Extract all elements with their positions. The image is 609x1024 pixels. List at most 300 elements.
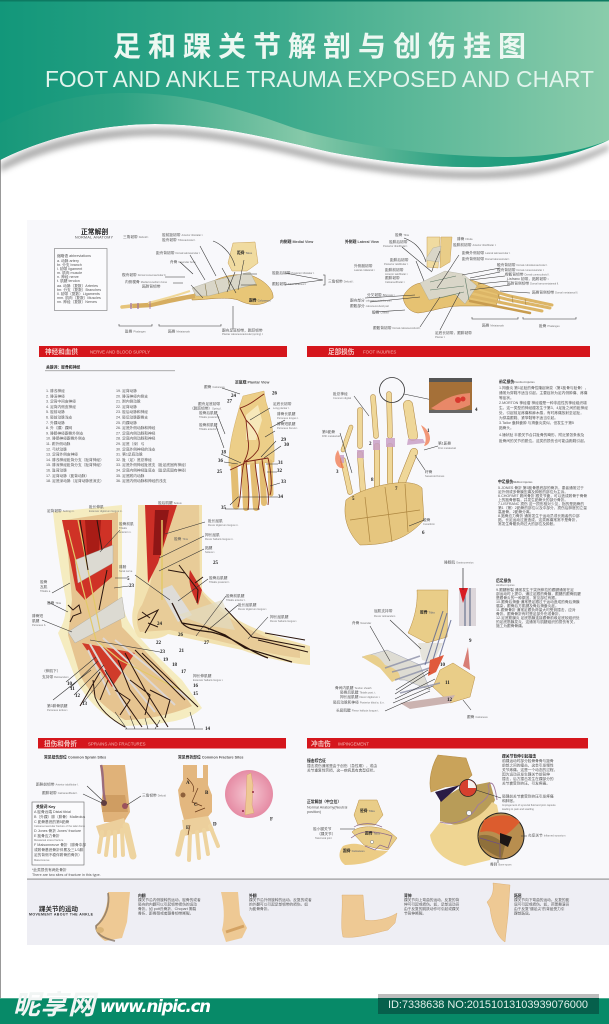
heading: 踝关节的运动: [39, 904, 78, 913]
watermark logo: [13, 983, 211, 1022]
page frame line: [0, 0, 1, 1024]
hindfoot figure: 拇长屈肌腱 Flexor digitorum t.: [340, 694, 381, 699]
ankle side view with nerves: 26: [178, 633, 184, 638]
plantar view foot: 25: [217, 470, 222, 475]
text: forefoot injuries: 2.MORTON 神经瘤 神经瘤是一种非癌性的神经组织增: [499, 400, 587, 405]
key phrase with rule: 关键词：胫骨和神经: [46, 364, 80, 370]
labels: medial view: 跟舟足底韧带，跳跃韧带: [222, 328, 263, 332]
labels: lateral view: 跖骨 Metatarsals: [482, 322, 505, 328]
text: hindfoot injuries: 是跟骨炎的一种原因，常见部位有跟。: [496, 595, 559, 600]
large ankle section figure: 因为运动员发生踝关节前背伸: [502, 772, 550, 776]
text: forefoot injuries: 3.Tailor 囊肿囊肿 与拇囊炎类似，但发生于第5: [499, 420, 574, 425]
hindfoot figure: 胫骨 Tibia: [420, 610, 435, 614]
text: inversion: 胫舟的内翻可以引起韧带损伤的运动: [138, 902, 197, 906]
ankle dorsal view with nerves: 15: [193, 692, 198, 697]
labels: medial view: 三角韧带 Deltoid l.: [123, 234, 149, 239]
numbered legend list: 20. 腓深神经内侧支: [116, 393, 148, 398]
text: forefoot injuries: 跖骨头。: [499, 425, 514, 430]
labels: lateral view: 跟骰背韧带 Dorsal calcaneocuboid l.: [373, 325, 421, 330]
common fracture sites figure: B: [205, 791, 209, 796]
common fracture sites figure: E: [186, 826, 190, 831]
text: eversion: 的外翻可以引起足部韧带的损伤。如: [249, 902, 308, 906]
text: forefoot injuries: 4.锤状趾 半脱关节合并趾骨的畸形，附近紧张条索及: [499, 432, 585, 437]
foot injuries skeleton: 5: [352, 497, 355, 502]
text: hindfoot injuries: 骨折。跟骨骨折有时是足部外伤或骨折。: [496, 611, 562, 616]
normal anatomy heading: position): [307, 810, 321, 814]
abbreviations box: 缩略语 abbreviations: [57, 253, 91, 258]
labels: lateral view: Lisfranc 韧带，跖跗韧带 l.: [507, 276, 549, 281]
text: midfoot injuries: 常发生骨骼负荷过大的部位及肿胀。: [498, 521, 557, 526]
ankle side view with nerves: 胫骨 Tibia: [174, 536, 188, 541]
plantar view foot: 足底观 Plantar View: [235, 380, 269, 384]
text: inversion: 骨折、距骨颈或者跟骨韧带撕裂。: [138, 910, 193, 916]
foot injuries skeleton: Fifth metatarsal: [322, 434, 340, 438]
text: midfoot injuries: 8.跖骨应力骨折 通常发生于运动员或长跑者的中部: [498, 513, 580, 518]
numbered legend list: 23. 胫后动脉和神经: [116, 409, 148, 414]
fracture detail circle: F: [270, 818, 273, 822]
ankle side view with nerves: Tibialis posterior t.: [209, 580, 230, 584]
numbered legend list: 5. 胫前动脉: [46, 409, 65, 414]
labels: lateral view: Calcaneofibular l.: [385, 280, 405, 284]
ankle dorsal view with nerves: 胫骨前肌: [119, 521, 134, 526]
text: dorsiflexion: 背伸: [404, 893, 412, 898]
text: hindfoot injuries: 11.跟骨骨折 通常足跟负荷量大时受到撞击，应对: [496, 607, 576, 612]
tendon detail with arrow: [459, 568, 476, 626]
text: plantarflexion: 跖屈: [514, 893, 522, 898]
numbered legend list: 16. 趾背动脉: [46, 468, 67, 472]
ankle dorsal view with nerves: 23: [129, 584, 134, 589]
abbreviations box: br. 分支 branch: [57, 262, 82, 267]
large ankle section figure: leading to pain and swelling: [502, 807, 534, 811]
labels: lateral view: 楔舟背韧带 Dorsal cuneonavicular l.: [497, 267, 544, 272]
section bar: nerve and blood supply: [39, 346, 287, 357]
section bar: foot injuries: FOOT INJURIES: [363, 350, 396, 354]
large ankle section figure: 炎症关节 Inflamed synovium: [528, 832, 565, 838]
ankle side view with nerves: 24: [157, 622, 162, 627]
panel: movement about the ankle: [29, 883, 570, 942]
numbered legend list: 19. 足背动脉: [116, 388, 137, 393]
ankle dorsal view with nerves: [32, 504, 223, 732]
ankle dorsal view with nerves: Peroneus b.: [32, 623, 46, 627]
hindfoot figure: 腓肠肌 Gastrocnemius: [444, 560, 474, 564]
numbered legend list: 15. 腓深神经趾背分支（趾背神经）: [46, 462, 104, 467]
text: forefoot injuries: 1.拇囊炎 第1足趾的骨性隆起病变（第1跖骨与趾骨），: [499, 385, 588, 390]
labels: lateral view: 外侧副韧带: [354, 263, 373, 268]
labels: lateral view: Anterior talofibular l.: [385, 272, 408, 276]
foot: medial view: [122, 242, 273, 309]
text: eversion: [249, 893, 312, 911]
plantar view foot: 35: [221, 506, 226, 511]
foot injuries skeleton: 第1跖骨: [438, 440, 451, 446]
small ankle section figure: （踝关节）: [317, 831, 335, 836]
numbered legend list: 14. 腓浅神经趾背分支（趾背神经）: [46, 457, 104, 462]
plantar view foot: 34: [278, 495, 284, 500]
labels: lateral view: 距腓后韧带: [390, 257, 409, 262]
ankle dorsal view with nerves: 瓦肌: [40, 584, 48, 589]
labels: medial view: Plantar calcaneonavicular (spring) l.: [222, 332, 264, 336]
numbered legend list: 21. 跗内侧动脉: [116, 399, 141, 404]
labels: lateral view: 三角韧带 Deltoid l.: [328, 278, 354, 284]
numbered legend list: 7. 外踝动脉: [46, 420, 65, 425]
ankle dorsal view with nerves: Extensor digitorum longus m.: [89, 509, 123, 513]
foot: dorsiflexion: [342, 895, 397, 937]
numbered legend list: 29. 足底（深）弓: [116, 441, 145, 446]
ankle dorsal view with nerves: 22: [156, 641, 162, 646]
text: plantarflexion: 踝关节向下弯曲的运动。反复的跖: [514, 897, 570, 902]
foot injuries skeleton: 4: [475, 408, 478, 413]
plantar view foot: Peroneus longus t.: [277, 416, 299, 420]
text: forefoot injuries: [499, 379, 588, 443]
labels: lateral view: [328, 232, 578, 339]
ankle dorsal view with nerves: 足背韧带 Setting m.: [47, 508, 75, 513]
text: hindfoot injuries: 后足损伤: [496, 578, 511, 583]
heading: MOVEMENT ABOUT THE ANKLE: [29, 912, 94, 916]
hindfoot figure: 跟骨 Calcaneus: [467, 714, 488, 719]
abbreviations box: nn. 神经（复数）Nerves: [57, 299, 97, 304]
foot injuries skeleton: 2: [369, 442, 372, 447]
ankle dorsal view with nerves: （伸肌下）: [42, 668, 60, 673]
text: forefoot injuries: 为穿高跟鞋、紧窄鞋等不适当引起。: [499, 415, 558, 420]
ankle side view with nerves: 拇长屈肌: [205, 532, 220, 537]
labels: medial view: 舟骨 Navicular bone: [170, 259, 196, 264]
labels: medial view: 内侧楔骨 Medial cuneiform bone: [125, 279, 168, 284]
text: midfoot injuries: 6.CHOPART 跗间骨折 跟关节囊，可以造成跗骨于骨骨: [498, 493, 587, 498]
foot injuries skeleton: 3: [336, 470, 339, 475]
small ankle section figure: [313, 800, 397, 865]
ankle dorsal view with nerves: 12: [75, 694, 80, 699]
small ankle section figure: 胫骨 Tibia: [360, 808, 375, 813]
numbered legend list: 35. 足底跗内动脉: [116, 473, 145, 478]
key box: A 胫骨远端 Distal tibial: [34, 809, 71, 814]
header banner: [0, 0, 609, 179]
plantar view foot: 腓骨短肌腱: [277, 421, 296, 426]
normal anatomy heading: Normal Anatomy(Neutral: [307, 806, 348, 810]
plantar view foot: Tibialis anterior t.: [199, 427, 219, 431]
ankle dorsal view with nerves: 拇长伸肌腱: [193, 673, 212, 678]
hindfoot figure: 11: [445, 681, 450, 686]
panel: normal anatomy: [54, 227, 315, 336]
section bar: sprains and fractures: [38, 738, 286, 748]
labels: lateral view: 胫骨 Tibia: [395, 232, 409, 237]
common fracture sites figure: D: [213, 822, 217, 828]
numbered legend list: 18. 足底深动脉（足背动脉底深支）: [46, 478, 104, 483]
common sprain sites figure: 跟腓韧带 Calcaneofibular l.: [42, 790, 78, 795]
labels: medial view: 距骨 Talus: [237, 250, 253, 255]
labels: lateral view: 跖骨背侧韧带 Dorsal metatarsal ll.: [532, 290, 578, 294]
numbered legend list: 11. 跗外侧动脉: [46, 441, 71, 446]
note: There are two sites of fracture in this type.: [32, 873, 101, 877]
abbreviations box: aa. 动脉（复数）Arteries: [57, 283, 98, 288]
ankle side view with nerves: 胫骨前肌腱: [226, 593, 245, 598]
section bar: sprains and fractures: 扭伤和骨折: [44, 739, 77, 748]
numbered legend list: 25. 内踝动脉: [116, 420, 137, 425]
hindfoot figure: [333, 560, 488, 719]
abbreviations box: mm. 肌肉（复数）Muscles: [57, 295, 101, 300]
text: midfoot injuries: 高度骨，2跖骨分离。: [498, 509, 533, 514]
key box: C 跖骨基底的第5跖骨: [34, 819, 70, 824]
small ankle section figure: Talocrural joint: [315, 836, 332, 840]
plantar view foot: 跟骨 Calcaneus: [204, 384, 225, 389]
key box: B（外踝）腓（腓骨）Malleolus: [34, 814, 85, 819]
key box: Maisonneuve: [34, 858, 50, 862]
hindfoot figure: 10: [440, 663, 446, 668]
large ankle section figure: 骨刺 Bone spurs: [490, 862, 512, 866]
ankle dorsal view with nerves: 第3腓骨肌腱: [47, 703, 68, 708]
labels: lateral view: 骰舟背韧带 Dorsal cuboideonavicular l.: [497, 262, 548, 267]
key box: Metatarsal stress fracture: [34, 838, 64, 842]
plantar view foot: 33: [281, 480, 286, 485]
key box: F Maisonneuve 骨折（腓骨中部: [34, 842, 86, 847]
small ankle section figure: 距骨 Talus: [365, 830, 381, 836]
ankle dorsal view with nerves: 11: [70, 687, 75, 692]
common fracture sites figure: 常见骨折部位 Common Fracture Sites: [178, 754, 243, 760]
numbered legend list: 9. 腓肠神经跟骨外侧支: [46, 430, 84, 435]
ankle dorsal view with nerves: Extensor hallucis longus t.: [193, 678, 223, 682]
normal anatomy heading: 正常解剖（中立位）: [307, 799, 341, 804]
abbreviations box: [54, 248, 107, 310]
ankle dorsal view with nerves: 19: [163, 658, 168, 663]
heading: normal anatomy: [75, 227, 114, 240]
foot injuries skeleton: 骰骨: [423, 517, 431, 522]
plantar view foot: （跳跃韧带）Spring l.: [190, 406, 222, 410]
impingement syndrome text: 撞击综合征: [307, 758, 326, 763]
plantar view foot: 胫骨前肌腱: [199, 422, 218, 427]
text: plantarflexion: 由于反复"绷足尖"的背屈受力引: [514, 906, 565, 911]
content sheet: [27, 220, 609, 945]
normal anatomy heading: [307, 799, 348, 814]
plantar view foot: 31: [278, 461, 284, 466]
labels: medial view: 楔舟韧带 Dorsal cuneonavicular ll.: [122, 272, 166, 277]
abbreviations box: a. 动脉 artery: [57, 258, 79, 263]
key box: 足的背侧不稳伴跗骨的骨折）: [34, 852, 82, 857]
key box: D Jones 骨折 Jones' fracture: [34, 828, 81, 833]
ankle side view with nerves: Flexor digitorum longus t.: [238, 607, 267, 611]
ankle dorsal view with nerves: 5: [127, 577, 130, 582]
labels: medial view: 胫舟韧带 Tibionavicular l.: [162, 237, 196, 242]
plantar view foot: 27: [227, 400, 232, 404]
plantar view foot: 30: [284, 443, 290, 448]
text: inversion: 踝关节沿内侧旋转的运动，胫骨的或者: [138, 897, 201, 902]
labels: medial view: 跖跗背韧带: [142, 284, 161, 288]
ankle dorsal view with nerves: 支持带 Retinaculum: [42, 674, 69, 679]
numbered legend list: 1. 腓浅神经: [46, 388, 65, 393]
text: hindfoot injuries: 感染，跟骨后方肌腱及骨后滑囊炎症。: [496, 603, 559, 608]
labels: lateral view: 外侧观 Lateral View: [345, 239, 379, 244]
ankle dorsal view with nerves: 胫骨: [40, 579, 48, 584]
numbered legend list: 10. 腓肠神经跟骨外侧支: [46, 436, 86, 441]
hindfoot figure: 舟骨 Navicular: [352, 620, 371, 625]
text: forefoot injuries: 等症状。: [499, 395, 514, 400]
large ankle section figure: Impingement of synovial fluid and joint capsule: [502, 803, 556, 807]
hindfoot figure: Flexor retinaculum: [374, 614, 395, 618]
foot injuries skeleton: Common digital: [333, 396, 351, 400]
ankle dorsal view with nerves: Peroneus tertius t.: [47, 708, 68, 712]
numbered legend list: 24. 胫后动脉跟骨支: [116, 414, 148, 420]
foot injuries skeleton: 7: [395, 487, 398, 492]
foot injuries skeleton: 8: [371, 478, 374, 483]
text: hindfoot injuries: 施工为跟骨骨痛。: [496, 623, 526, 628]
numbered legend list: 6. 胫前动脉浅支: [46, 414, 73, 420]
ankle dorsal view with nerves: 趾长伸肌: [89, 504, 104, 509]
text: hindfoot injuries: 10.跟骨后滑囊 通常是足跟过于运动造成的骨后滑膜: [496, 599, 580, 604]
common sprain sites figure: 常见扭伤部位 Common Sprain Sites: [44, 754, 106, 760]
key box: [32, 802, 86, 865]
impingement syndrome text: [307, 758, 377, 772]
ankle side view with nerves: [132, 500, 310, 665]
ankle dorsal view with nerves: Tibialis: [119, 526, 128, 530]
labels: lateral view: 胫腓后韧带: [389, 239, 408, 244]
ankle side view with nerves: 胫骨后肌腱: [209, 575, 228, 580]
ankle dorsal view with nerves: 13: [82, 702, 88, 707]
text: eversion: 踝关节沿外侧旋转的运动。反复的或者: [249, 897, 312, 902]
hindfoot figure: 长屈肌腱 Flexor hallucis longus t.: [336, 708, 379, 712]
key box: Calcaneonavicular fracture of the talar dome: [34, 824, 86, 828]
numbered legend list: 28. 足底内侧动脉和神经: [116, 436, 156, 441]
labels: lateral view: 趾骨 Phalanges: [539, 323, 560, 328]
foot injuries skeleton: 趾总神经: [333, 391, 348, 396]
large ankle section figure: 前部之间的撞击，这会引发慢性: [502, 762, 554, 768]
labels: medial view: 胫前距韧带 Anterior tibiotalar l.: [162, 232, 203, 237]
ankle side view with nerves: 拇长屈肌腱: [270, 614, 289, 619]
foot injuries skeleton: Cuneiform: [423, 522, 435, 526]
text: midfoot injuries: 第1（第）2跖骨的部位以及中部分，损伤后肿胀的立量: [498, 505, 587, 510]
section bar: nerve and blood supply: 神经和血供: [45, 347, 78, 356]
foot: plantarflexion: [487, 883, 510, 942]
labels: medial view: [119, 232, 315, 336]
plantar view foot: 18: [221, 450, 226, 456]
foot injuries skeleton: First metatarsal: [438, 446, 456, 450]
hindfoot figure: 9: [469, 639, 472, 644]
image id box: ID:7338638 NO:20151013103939076000: [388, 999, 588, 1011]
labels: lateral view: Posterior tibiofibular l.: [383, 244, 408, 248]
plantar view foot: 跟舟足底韧带: [198, 401, 220, 406]
text: eversion: 外翻: [249, 893, 257, 898]
plantar view foot: 26: [272, 392, 278, 396]
text: midfoot injuries: 中足损伤Midfoot injuries: [498, 479, 533, 484]
labels: medial view: 胫距后韧带 Posterior tibiotalar l.: [272, 270, 315, 275]
watermark logo: www.nipic.cn: [100, 997, 211, 1016]
hindfoot figure: 胫后动脉和神经 Posterior tibial a. & n.: [333, 700, 385, 704]
numbered legend list: 31. 第1足底动脉: [116, 452, 143, 457]
numbered legend list: 27. 足底内侧动脉和神经: [116, 430, 156, 435]
abbreviations box: n. 神经 nerve: [57, 274, 79, 279]
foot injuries skeleton: Sesamoid bones: [425, 474, 445, 478]
inset photo of toes: [429, 378, 472, 413]
impingement syndrome text: 关节重复性劳损，这一疾病具有典型症状。: [307, 768, 377, 772]
text: forefoot injuries: 处，引起前足疼痛和麻木感，有时疼痛放射至足趾，: [499, 410, 584, 415]
labels: lateral view: 跖跗背侧韧带 Dorsal tarsometatarsal ll.: [507, 280, 559, 286]
labels: medial view: 跖骨 Metatarsals: [168, 328, 191, 334]
ankle dorsal view with nerves: 16: [193, 684, 198, 689]
hindfoot figure: 胫骨后肌腱 Tibialis post. t.: [340, 690, 376, 694]
text: dorsiflexion: [404, 893, 460, 916]
ankle side view with nerves: Flexor hallucis longus t.: [270, 619, 297, 623]
ankle side view with nerves: 25: [213, 561, 218, 566]
ankle dorsal view with nerves: 10: [67, 682, 72, 687]
labels: medial view: 趾骨 Phalanges: [125, 328, 146, 334]
large ankle section figure: 和肿胀。: [502, 798, 517, 803]
ankle dorsal view with nerves: 17: [181, 670, 186, 675]
text: eversion: 为跖骨骨折。: [249, 906, 271, 911]
common fracture sites figure: C: [194, 803, 198, 808]
ankle side view with nerves: 跖腱: [205, 545, 213, 550]
abbreviations box: l. 韧带 ligament: [57, 266, 82, 271]
labels: lateral view: Lateral collateral l.: [354, 268, 375, 272]
plantar view foot: 24: [231, 394, 236, 399]
numbered legend list: 32. 趾（足）底总神经: [116, 457, 152, 462]
small ankle section figure: 胫小腿关节: [313, 826, 332, 831]
labels: lateral view: 距骨外侧韧带 Lateral talonavicular l.: [462, 250, 511, 255]
numbered legend list: 8. 外（踝）踝网: [46, 425, 73, 430]
hindfoot figure: 骨间内肌腱 Tendon sheath: [335, 685, 372, 690]
common sprain sites figure: [36, 754, 166, 856]
small ankle section figure: 跟骨 Calcaneus: [343, 848, 365, 853]
large ankle section figure: 胫踝前关节囊受到挤压引发疼痛: [502, 794, 554, 798]
large ankle section figure: [430, 754, 565, 866]
plantar view foot: Peroneus brevis t.: [277, 426, 298, 430]
section bar: impingement: 冲击伤: [311, 739, 331, 748]
plantar view foot: 胫骨后肌腱: [199, 410, 218, 415]
footer bar: [0, 983, 609, 1024]
plantar view foot: 腓骨长肌腱: [277, 411, 296, 416]
abbreviations box: ll. 韧带（复数）Ligaments: [57, 291, 100, 296]
text: hindfoot injuries: 12.足底筋膜炎 足底筋膜连接跟骨前缘足底软组织处: [496, 615, 580, 620]
labels: lateral view: 距舟背侧韧带 Dorsal talonavicular l.: [462, 256, 510, 261]
text: forefoot injuries: 趾骨间的关节的脱位。这类的损伤也可能由跑鞋引起。: [499, 438, 588, 443]
impingement syndrome text: 撞击损伤通常是由于创伤（急性期），或由: [307, 763, 377, 768]
key box: 关键词 Key: [36, 804, 56, 809]
ankle dorsal view with nerves: 14: [205, 727, 210, 732]
section bar: foot injuries: 足部损伤: [328, 347, 355, 356]
labels: lateral view: 楔骰背韧带 Dorsal cuneocuboid l.: [505, 272, 550, 276]
plantar view foot: Tibialis posterior t.: [199, 415, 220, 419]
ankle dorsal view with nerves: 18: [172, 663, 178, 668]
labels: medial view: 距舟背韧带 Dorsal talonavicular l.: [156, 250, 201, 255]
text: hindfoot injuries: 部运动时上提中，通过足跟的骨膜，跟腱的跟骨肌腱: [496, 591, 581, 596]
large ankle section figure: 前踝运动时部分胫骨骨骨与距骨: [502, 758, 554, 763]
ankle side view with nerves: 27: [204, 641, 210, 646]
image id box: [378, 994, 599, 1014]
key box: E 跖骨应力骨折: [34, 833, 60, 838]
ankle dorsal view with nerves: 胫骨 Tibia: [47, 600, 61, 605]
foot: eversion: [221, 892, 247, 942]
text: midfoot injuries: 7.LISFRANC 损伤 这一损伤相对少见，指的是跖骨的: [498, 501, 584, 506]
labels: lateral view: 腓骨 Fibula: [457, 236, 473, 241]
text: hindfoot injuries: Hindfoot injuries: [496, 583, 515, 587]
panel: lateral view: [285, 232, 578, 339]
key phrase with rule: [45, 364, 175, 371]
ankle dorsal view with nerves: 腓骨短: [32, 613, 43, 618]
foot injuries skeleton: 6: [422, 531, 425, 536]
fracture detail circle: [225, 770, 273, 822]
ankle side view with nerves: Flexor hallucis longus m.: [205, 537, 234, 541]
ankle dorsal view with nerves: 腓肠: [119, 564, 127, 569]
text: midfoot injuries: 上的跖骨断裂，并发生跖骨头的部分骨折。: [498, 497, 568, 502]
large ankle section figure: 踝关节背伸引起撞击: [502, 754, 536, 758]
numbered legend list: 2. 腓深神经: [46, 393, 65, 398]
labels: lateral view: 胫腓前韧带 Anterior tibiofibular l.: [453, 242, 496, 247]
common sprain sites figure: 距腓前韧带 Anterior talofibular l.: [36, 782, 79, 786]
numbered legend list: 12. 弓状动脉: [46, 446, 67, 451]
common fracture sites figure: [178, 754, 243, 860]
text: hindfoot injuries: 9.跟腱断裂 通常发生于突然伸拉的跟腱通常在足: [496, 587, 574, 592]
text: forefoot injuries: 生。这一类型的神经瘤发生于第3、4足趾之间的趾神经: [499, 405, 588, 410]
ankle side view with nerves: 趾长屈肌腱: [238, 602, 257, 607]
section bar: nerve and blood supply: NERVE AND BLOOD SUPPLY: [90, 350, 150, 354]
labels: medial view: 内侧观 Medial View: [280, 239, 313, 244]
text: forefoot injuries: 前足损伤Forefoot injuries: [499, 379, 535, 384]
labels: lateral view: 跟骰部分 calcaneocuboid part: [350, 303, 389, 308]
